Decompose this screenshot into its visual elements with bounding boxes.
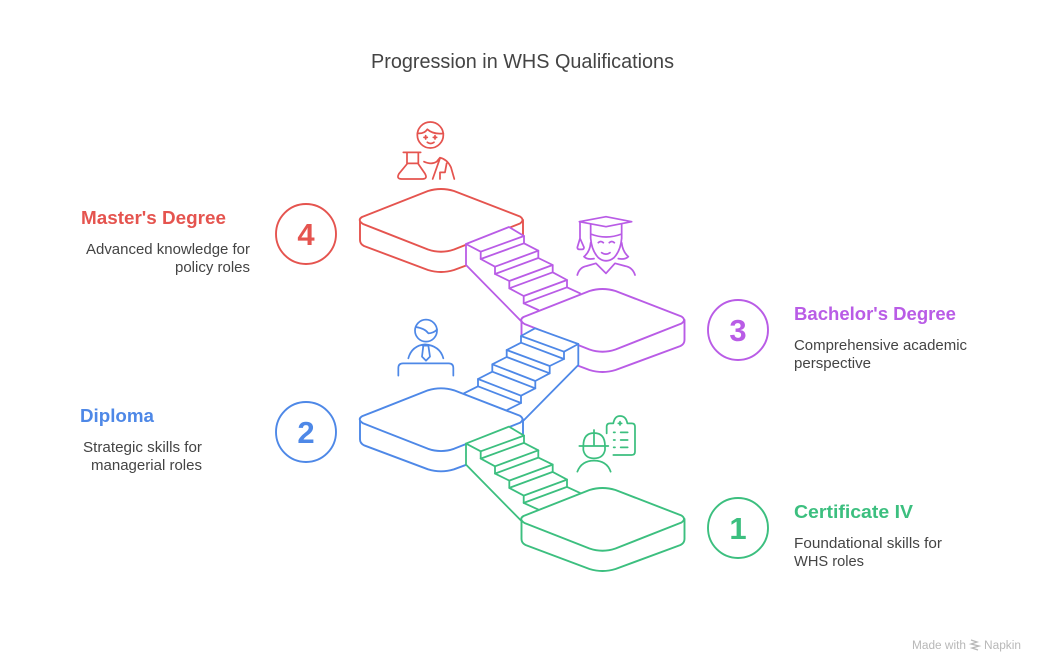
platform: Diploma bbox=[360, 388, 523, 471]
icon: manager at desk bbox=[398, 320, 453, 376]
stairs: green bbox=[466, 427, 600, 521]
description: Bachelor's Degree bbox=[794, 338, 967, 372]
description: Master's Degree: Advanced knowledge for bbox=[86, 242, 250, 258]
badge: 4: 4 bbox=[297, 217, 315, 252]
stairs: blue bbox=[464, 328, 578, 421]
footer: Made with Napkin: Made with bbox=[912, 640, 966, 652]
description: Diploma: managerial roles bbox=[91, 458, 202, 474]
stairs: purple bbox=[466, 227, 600, 322]
platform: Certificate IV bbox=[521, 488, 684, 571]
description: Certificate IV: Foundational skills for bbox=[794, 536, 942, 552]
description: Diploma bbox=[83, 440, 202, 474]
platform: Master's Degree bbox=[360, 189, 523, 272]
heading: Bachelor's Degree: Bachelor's Degree bbox=[794, 304, 956, 324]
icon: graduate with cap bbox=[577, 217, 635, 275]
badge: 1: 1 bbox=[729, 511, 747, 546]
badge: 4 bbox=[276, 204, 336, 264]
description: Bachelor's Degree: perspective bbox=[794, 356, 871, 372]
description: Bachelor's Degree: Comprehensive academic bbox=[794, 338, 967, 354]
footer: Made with Napkin: Napkin bbox=[984, 640, 1021, 652]
badge: 3 bbox=[708, 300, 768, 360]
icon: worker with clipboard bbox=[577, 416, 635, 472]
heading: Certificate IV: Certificate IV bbox=[794, 502, 913, 522]
description: Diploma: Strategic skills for bbox=[83, 440, 202, 456]
description: Certificate IV: WHS roles bbox=[794, 554, 864, 570]
heading: Diploma: Diploma bbox=[80, 406, 155, 426]
footer: Made with Napkin bbox=[912, 640, 1021, 652]
description: Master's Degree bbox=[86, 242, 250, 276]
badge: 2 bbox=[276, 402, 336, 462]
description: Certificate IV bbox=[794, 536, 942, 570]
badge: 2: 2 bbox=[297, 415, 315, 450]
platform: Bachelor's Degree bbox=[521, 289, 684, 372]
badge: 1 bbox=[708, 498, 768, 558]
badge: 3: 3 bbox=[729, 313, 747, 348]
icon: scientist with flask bbox=[398, 122, 454, 179]
description: Master's Degree: policy roles bbox=[175, 260, 250, 276]
title: Progression in WHS Qualifications bbox=[371, 51, 674, 73]
heading: Master's Degree: Master's Degree bbox=[81, 208, 226, 228]
